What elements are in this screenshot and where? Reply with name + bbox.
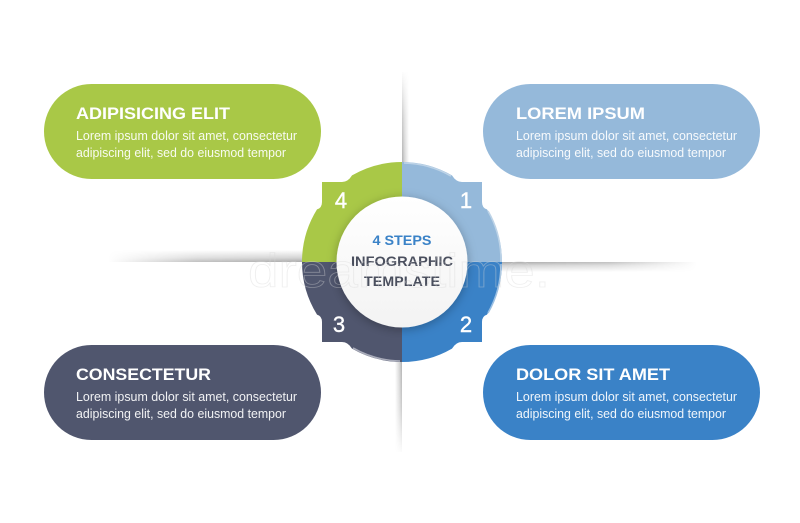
panel: lorem ipsum [483, 84, 760, 179]
number 3: 3 [333, 312, 345, 337]
heading: CONSECTETUR [76, 365, 211, 384]
panel: dolor sit amet [483, 345, 760, 440]
number 2: 2 [460, 312, 472, 337]
heading: DOLOR SIT AMET [516, 365, 671, 384]
text block: Lorem ipsum dolor sit amet, consectetur [516, 129, 737, 143]
number 4: 4 [335, 188, 347, 213]
heading: ADIPISICING ELIT [76, 104, 231, 123]
segment 3 [302, 262, 402, 362]
text block: adipiscing elit, sed do eiusmod tempor [76, 407, 286, 421]
center label [351, 232, 453, 289]
panel: adipisicing elit [44, 84, 321, 179]
watermark: dreamstime. [248, 244, 550, 297]
segment 2 [402, 262, 502, 362]
center circle [336, 196, 468, 328]
segment 1 [402, 162, 502, 262]
text block: adipiscing elit, sed do eiusmod tempor [76, 146, 286, 160]
center label: INFOGRAPHIC [351, 253, 453, 269]
text block: adipiscing elit, sed do eiusmod tempor [516, 407, 726, 421]
number 1: 1 [460, 188, 472, 213]
segment 4 [302, 162, 402, 262]
fold shadows [108, 72, 696, 452]
infographic [44, 78, 760, 447]
heading: LOREM IPSUM [516, 104, 645, 123]
center label: 4 STEPS [372, 232, 432, 248]
central ring diagram [302, 162, 502, 362]
text block: Lorem ipsum dolor sit amet, consectetur [76, 390, 297, 404]
panel: consectetur [44, 345, 321, 440]
text block: Lorem ipsum dolor sit amet, consectetur [76, 129, 297, 143]
text block: Lorem ipsum dolor sit amet, consectetur [516, 390, 737, 404]
text block: adipiscing elit, sed do eiusmod tempor [516, 146, 726, 160]
center label: TEMPLATE [364, 273, 440, 289]
